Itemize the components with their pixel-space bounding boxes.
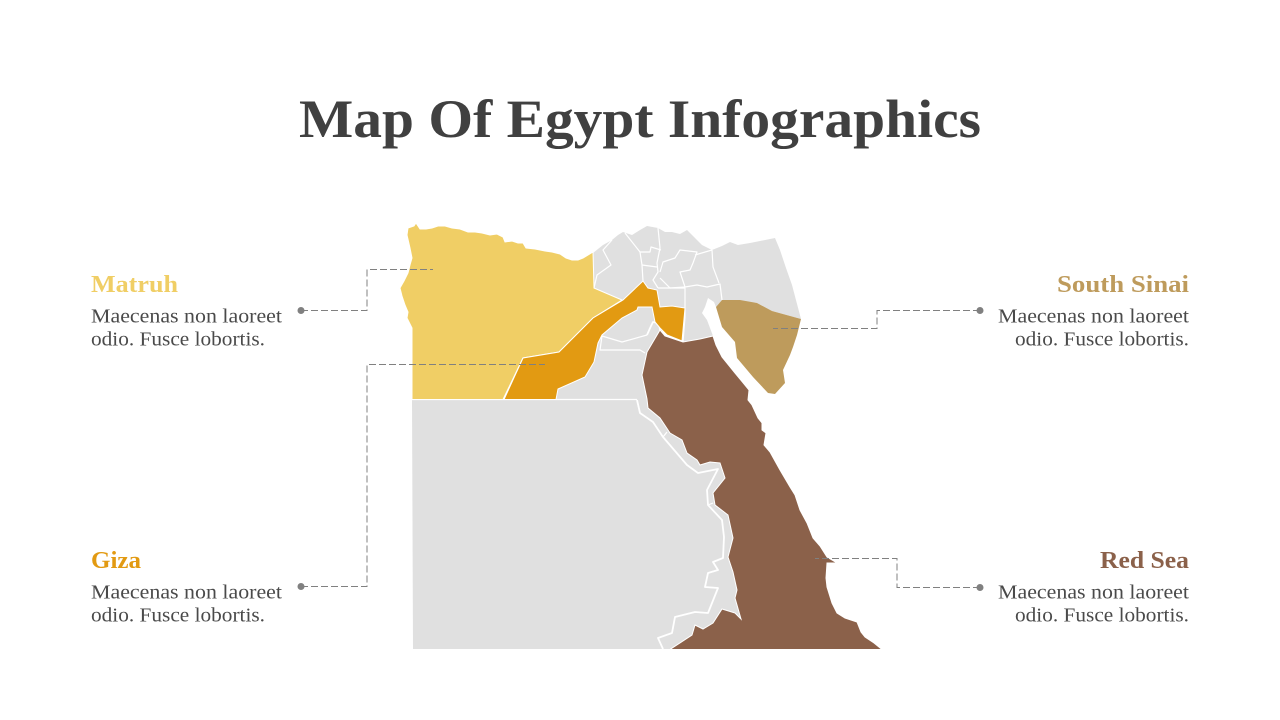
region: Red Sea: [642, 330, 882, 650]
title: Map Of Egypt Infographics: [299, 89, 981, 149]
label: South Sinai: odio. Fusce lobortis.: [1015, 330, 1189, 350]
label: Matruh: Matruh: [91, 272, 178, 298]
connector: Red Sea: [815, 558, 984, 591]
label: South Sinai: Maecenas non laoreet: [998, 306, 1190, 328]
label: South Sinai: [998, 272, 1190, 350]
label: Giza: Giza: [91, 548, 141, 574]
region: Giza: [504, 281, 685, 400]
label: Red Sea: [998, 548, 1190, 626]
label: South Sinai: South Sinai: [1057, 272, 1189, 298]
map of Egypt: [400, 223, 882, 650]
label: Red Sea: Red Sea: [1100, 548, 1189, 574]
label: Giza: odio. Fusce lobortis.: [91, 606, 265, 626]
region: South Sinai: [716, 300, 801, 394]
connector: Matruh: [298, 270, 433, 314]
label: Matruh: odio. Fusce lobortis.: [91, 330, 265, 350]
region: Matruh: [400, 223, 622, 400]
label: Red Sea: Maecenas non laoreet: [998, 582, 1190, 604]
connector: Giza: [298, 364, 545, 590]
region: other governorates: [412, 226, 801, 649]
connector: South Sinai: [773, 307, 984, 328]
label: Red Sea: odio. Fusce lobortis.: [1015, 606, 1189, 626]
label: Matruh: Maecenas non laoreet: [91, 306, 283, 328]
label: Giza: [91, 548, 283, 626]
label: Matruh: [91, 272, 283, 350]
label: Giza: Maecenas non laoreet: [91, 582, 283, 604]
